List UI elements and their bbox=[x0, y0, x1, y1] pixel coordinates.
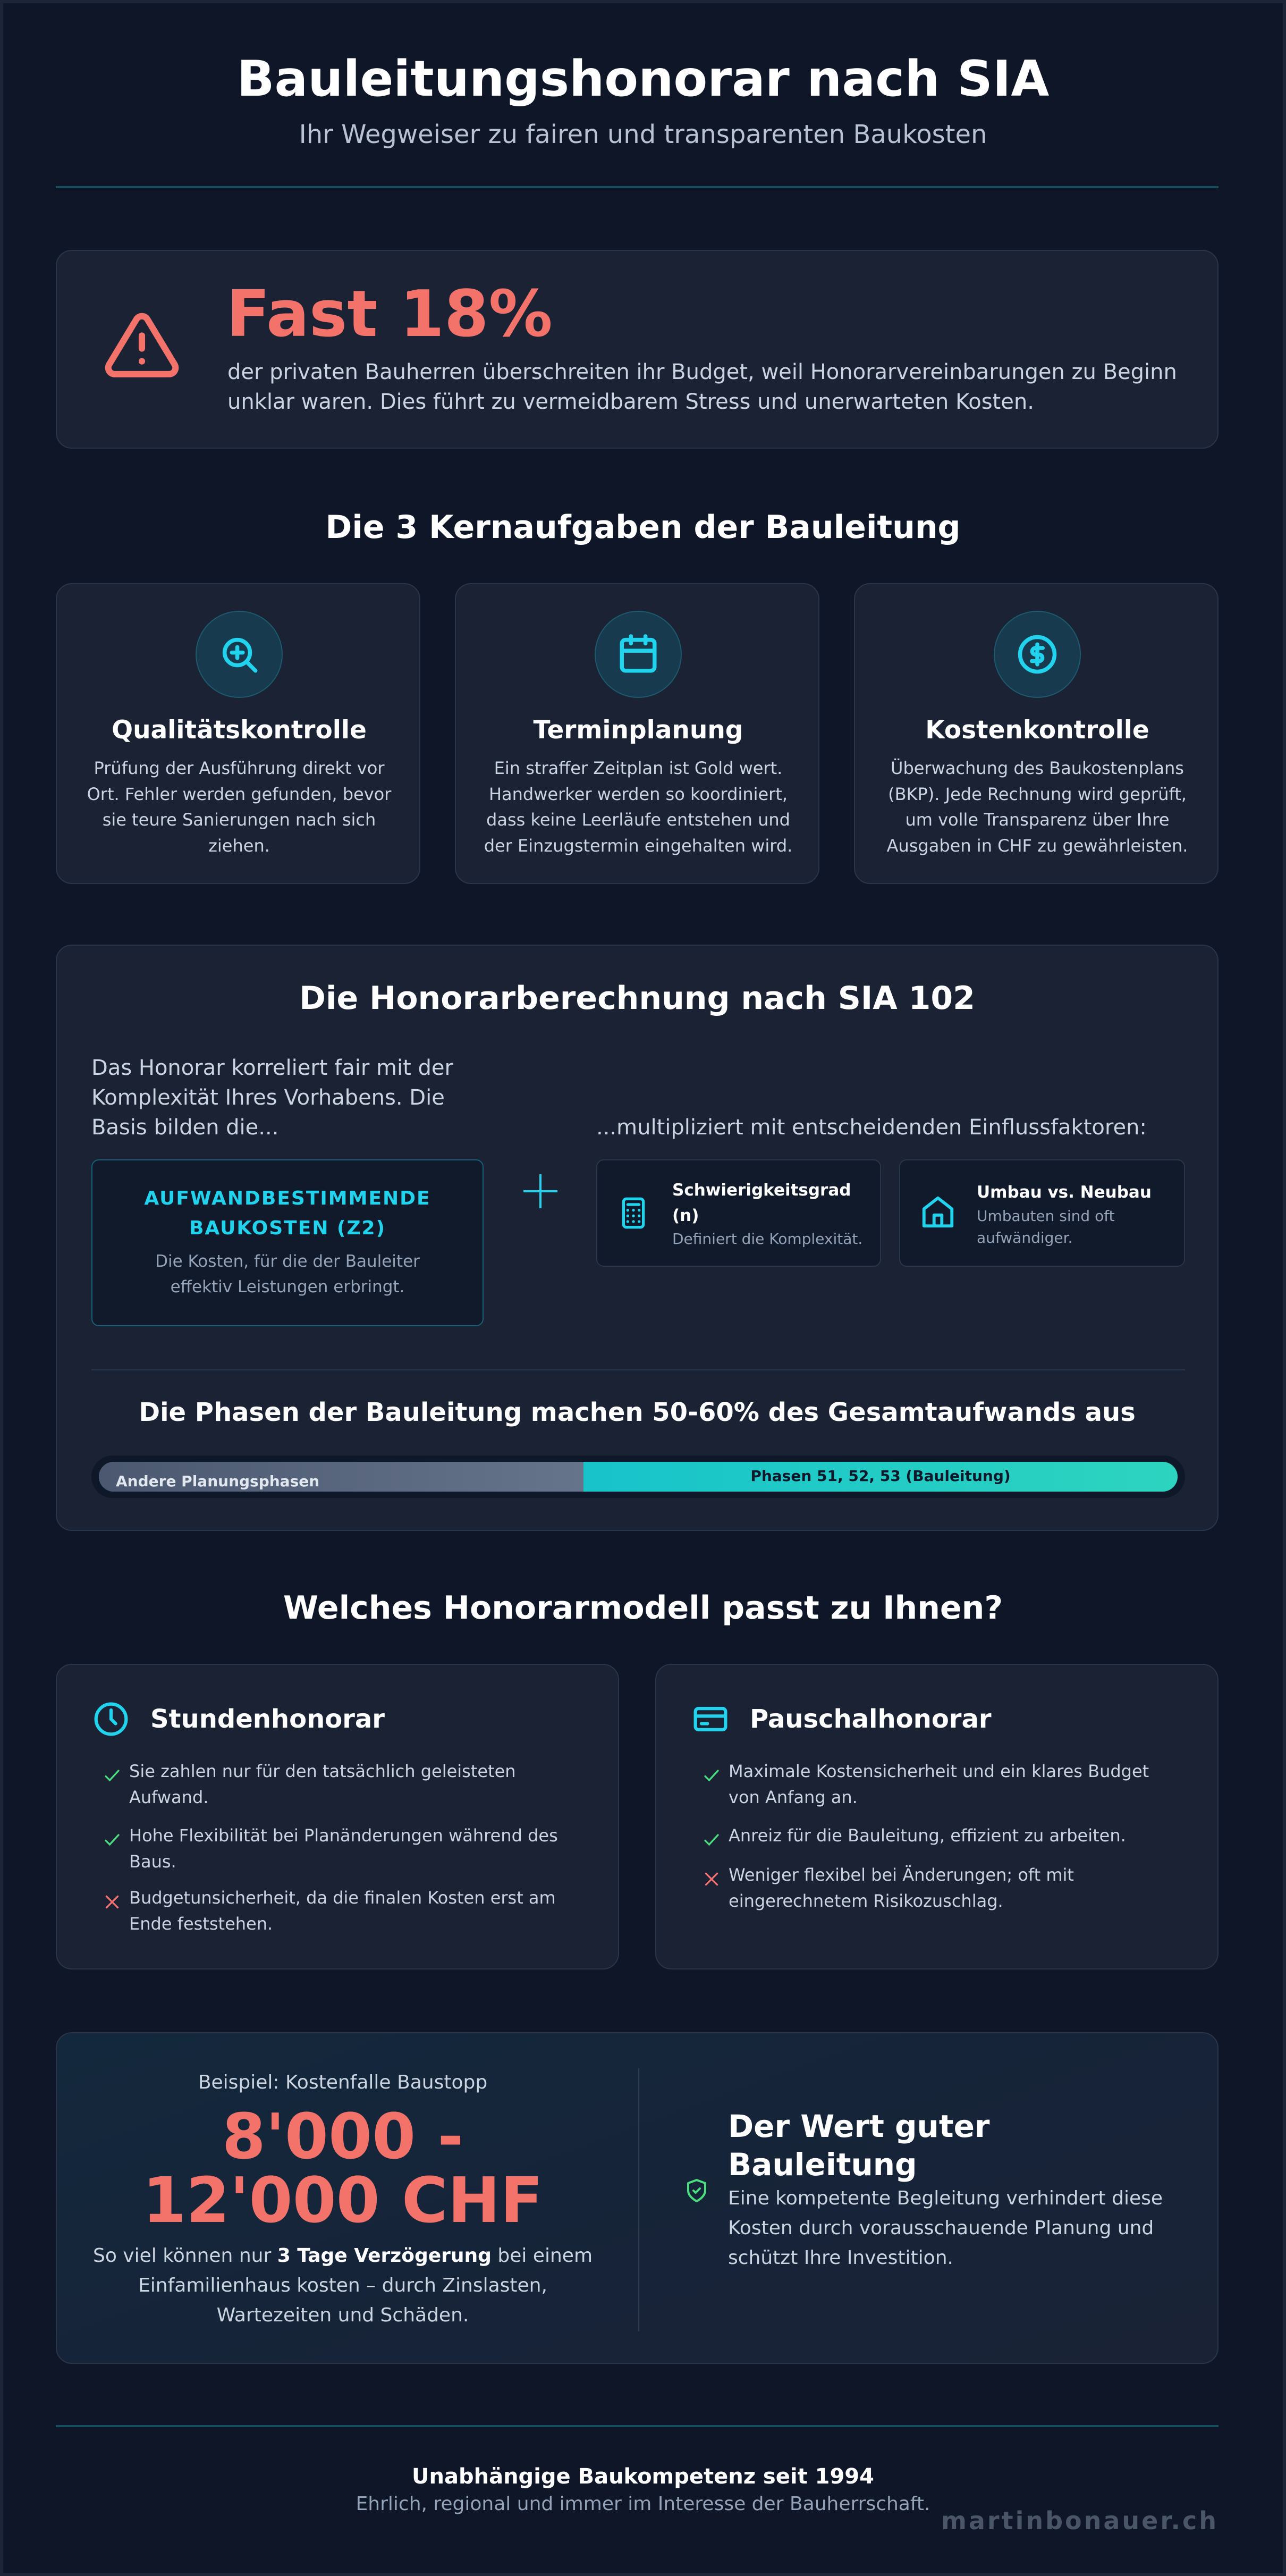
card text: Prüfung der Ausführung direkt vor bbox=[94, 758, 384, 778]
subtitle: Ihr Wegweiser zu fairen und transparenten Baukosten bbox=[299, 120, 987, 149]
model title: Pauschalhonorar bbox=[750, 1704, 992, 1734]
list: pros/cons: Ende feststehen. bbox=[129, 1914, 273, 1934]
box: Z2: effektiv Leistungen erbringt. bbox=[171, 1277, 404, 1297]
value text: schützt Ihre Investition. bbox=[728, 2247, 953, 2269]
card text: Ausgaben in CHF zu gewährleisten. bbox=[887, 836, 1188, 856]
list: pros/cons: Baus. bbox=[129, 1851, 176, 1872]
factor card: Umbau vs. Neubau: Umbauten sind oft bbox=[977, 1207, 1115, 1225]
phases heading: Die Phasen der Bauleitung machen 50-60% des Gesamtaufwands aus bbox=[139, 1398, 1136, 1427]
card text bbox=[87, 758, 391, 856]
card text: ziehen. bbox=[208, 836, 270, 856]
card text: um volle Transparenz über Ihre bbox=[905, 810, 1170, 830]
cost explanation: Einfamilienhaus kosten – durch Zinslasten, bbox=[138, 2275, 547, 2296]
panel: Stundenhonorar bbox=[56, 1664, 619, 1969]
box: Z2 bbox=[91, 1159, 484, 1326]
heading: Honorarmodell: Welches Honorarmodell passt zu Ihnen? bbox=[283, 1589, 1003, 1627]
panel: Qualitätskontrolle bbox=[56, 583, 420, 884]
panel: statistic callout bbox=[56, 250, 1219, 449]
model title: Stundenhonorar bbox=[150, 1704, 385, 1734]
card text: Ein straffer Zeitplan ist Gold wert. bbox=[494, 758, 782, 778]
icon: coin bbox=[994, 611, 1081, 698]
list: pros/cons: Weniger flexibel bei Änderungen; oft mit bbox=[729, 1865, 1074, 1885]
list: pros/cons: Hohe Flexibilität bei Planänderungen während des bbox=[129, 1825, 558, 1846]
list: pros/cons: Maximale Kostensicherheit und ein klares Budget bbox=[729, 1761, 1149, 1781]
value heading: Bauleitung bbox=[728, 2146, 917, 2183]
box: Z2: BAUKOSTEN (Z2) bbox=[189, 1217, 386, 1239]
big cost number: 8'000 - bbox=[222, 2100, 463, 2173]
stat number: Fast 18% bbox=[226, 277, 553, 351]
card text bbox=[484, 758, 792, 856]
card text: Handwerker werden so koordiniert, bbox=[489, 784, 788, 804]
stat text: unklar waren. Dies führt zu vermeidbarem Stress und unerwarteten Kosten. bbox=[227, 390, 1034, 414]
bar chart: phases bbox=[91, 1455, 1185, 1498]
intro text: Das Honorar korreliert fair mit der bbox=[91, 1056, 453, 1080]
stat text bbox=[227, 360, 1177, 414]
factor card: Schwierigkeitsgrad: Definiert die Komplexität. bbox=[672, 1230, 862, 1248]
footer subline: Ehrlich, regional und immer im Interesse der Bauherrschaft. bbox=[356, 2493, 930, 2515]
value heading bbox=[728, 2108, 990, 2183]
intro text: Basis bilden die... bbox=[91, 1115, 278, 1140]
card text: dass keine Leerläufe entstehen und bbox=[486, 810, 790, 830]
panel heading: Die Honorarberechnung nach SIA 102 bbox=[299, 980, 975, 1017]
title: Bauleitungshonorar nach SIA bbox=[237, 50, 1049, 107]
list: pros/cons: Budgetunsicherheit, da die finalen Kosten erst am bbox=[129, 1888, 556, 1908]
icon: calendar bbox=[595, 611, 682, 698]
factor card: Umbau vs. Neubau bbox=[899, 1159, 1185, 1267]
cost explanation: So viel können nur 3 Tage Verzögerung bei einem bbox=[93, 2245, 593, 2267]
panel: Terminplanung bbox=[455, 583, 819, 884]
stat text: der privaten Bauherren überschreiten ihr Budget, weil Honorarvereinbarungen zu Beginn bbox=[227, 360, 1177, 384]
list: pros/cons: eingerechnetem Risikozuschlag. bbox=[729, 1891, 1003, 1911]
panel: Honorarberechnung bbox=[56, 945, 1219, 1531]
icon: credit card bbox=[694, 1707, 727, 1731]
card title: Terminplanung bbox=[534, 715, 743, 745]
heading: Kernaufgaben: Die 3 Kernaufgaben der Bauleitung bbox=[326, 509, 960, 546]
factor card: Schwierigkeitsgrad: Schwierigkeitsgrad bbox=[672, 1181, 851, 1200]
list: pros/cons bbox=[704, 1761, 1149, 1911]
value text: Eine kompetente Begleitung verhindert diese bbox=[728, 2187, 1163, 2209]
panel: Pauschalhonorar bbox=[655, 1664, 1219, 1969]
value text: Kosten durch vorausschauende Planung und bbox=[728, 2217, 1154, 2239]
bar chart: phases: Andere Planungsphasen bbox=[116, 1472, 319, 1490]
factor card: Schwierigkeitsgrad bbox=[596, 1159, 881, 1267]
bar chart: phases: Phasen 51, 52, 53 (Bauleitung) bbox=[750, 1467, 1011, 1485]
list: pros/cons: Aufwand. bbox=[129, 1787, 208, 1807]
card text: (BKP). Jede Rechnung wird geprüft, bbox=[888, 784, 1187, 804]
card title: Kostenkontrolle bbox=[925, 715, 1149, 745]
value heading: Der Wert guter bbox=[728, 2108, 990, 2144]
list: pros/cons: Anreiz für die Bauleitung, effizient zu arbeiten. bbox=[729, 1825, 1126, 1846]
factor card: Umbau vs. Neubau: aufwändiger. bbox=[977, 1229, 1072, 1247]
list: pros/cons bbox=[105, 1761, 558, 1934]
big cost number: 12'000 CHF bbox=[142, 2163, 543, 2237]
panel: cost trap callout bbox=[56, 2032, 1219, 2364]
card title: Qualitätskontrolle bbox=[112, 715, 367, 745]
list: pros/cons: Sie zahlen nur für den tatsächlich geleisteten bbox=[129, 1761, 516, 1781]
icon: clock bbox=[95, 1702, 128, 1736]
card text: Überwachung des Baukostenplans bbox=[891, 758, 1184, 778]
example label: Beispiel: Kostenfalle Baustopp bbox=[198, 2072, 487, 2093]
factor card: Umbau vs. Neubau: Umbau vs. Neubau bbox=[977, 1183, 1152, 1202]
icon: plus bbox=[523, 1174, 557, 1208]
box: Z2: AUFWANDBESTIMMENDE bbox=[144, 1188, 431, 1209]
card text: sie teure Sanierungen nach sich bbox=[103, 810, 376, 830]
icon: warning triangle bbox=[105, 313, 179, 377]
intro text: Komplexität Ihres Vorhabens. Die bbox=[91, 1085, 445, 1110]
list: pros/cons: von Anfang an. bbox=[729, 1787, 858, 1807]
card text: Ort. Fehler werden gefunden, bevor bbox=[87, 784, 391, 804]
brand watermark: martinbonauer.ch bbox=[941, 2506, 1219, 2535]
value text bbox=[728, 2187, 1163, 2269]
intro text bbox=[91, 1056, 453, 1140]
panel: Kostenkontrolle bbox=[854, 583, 1219, 884]
box: Z2: Die Kosten, für die der Bauleiter bbox=[155, 1252, 420, 1271]
cost explanation bbox=[93, 2245, 593, 2326]
card text: der Einzugstermin eingehalten wird. bbox=[484, 836, 792, 856]
card text bbox=[886, 758, 1188, 856]
icon: shield check bbox=[687, 2179, 706, 2202]
factor card: Schwierigkeitsgrad: (n) bbox=[672, 1206, 699, 1225]
icon: zoom bbox=[196, 611, 283, 698]
footer tagline: Unabhängige Baukompetenz seit 1994 bbox=[412, 2464, 874, 2489]
big cost number bbox=[142, 2100, 543, 2237]
cost explanation: Wartezeiten und Schäden. bbox=[217, 2304, 469, 2326]
factors intro: ...multipliziert mit entscheidenden Einflussfaktoren: bbox=[596, 1115, 1147, 1140]
